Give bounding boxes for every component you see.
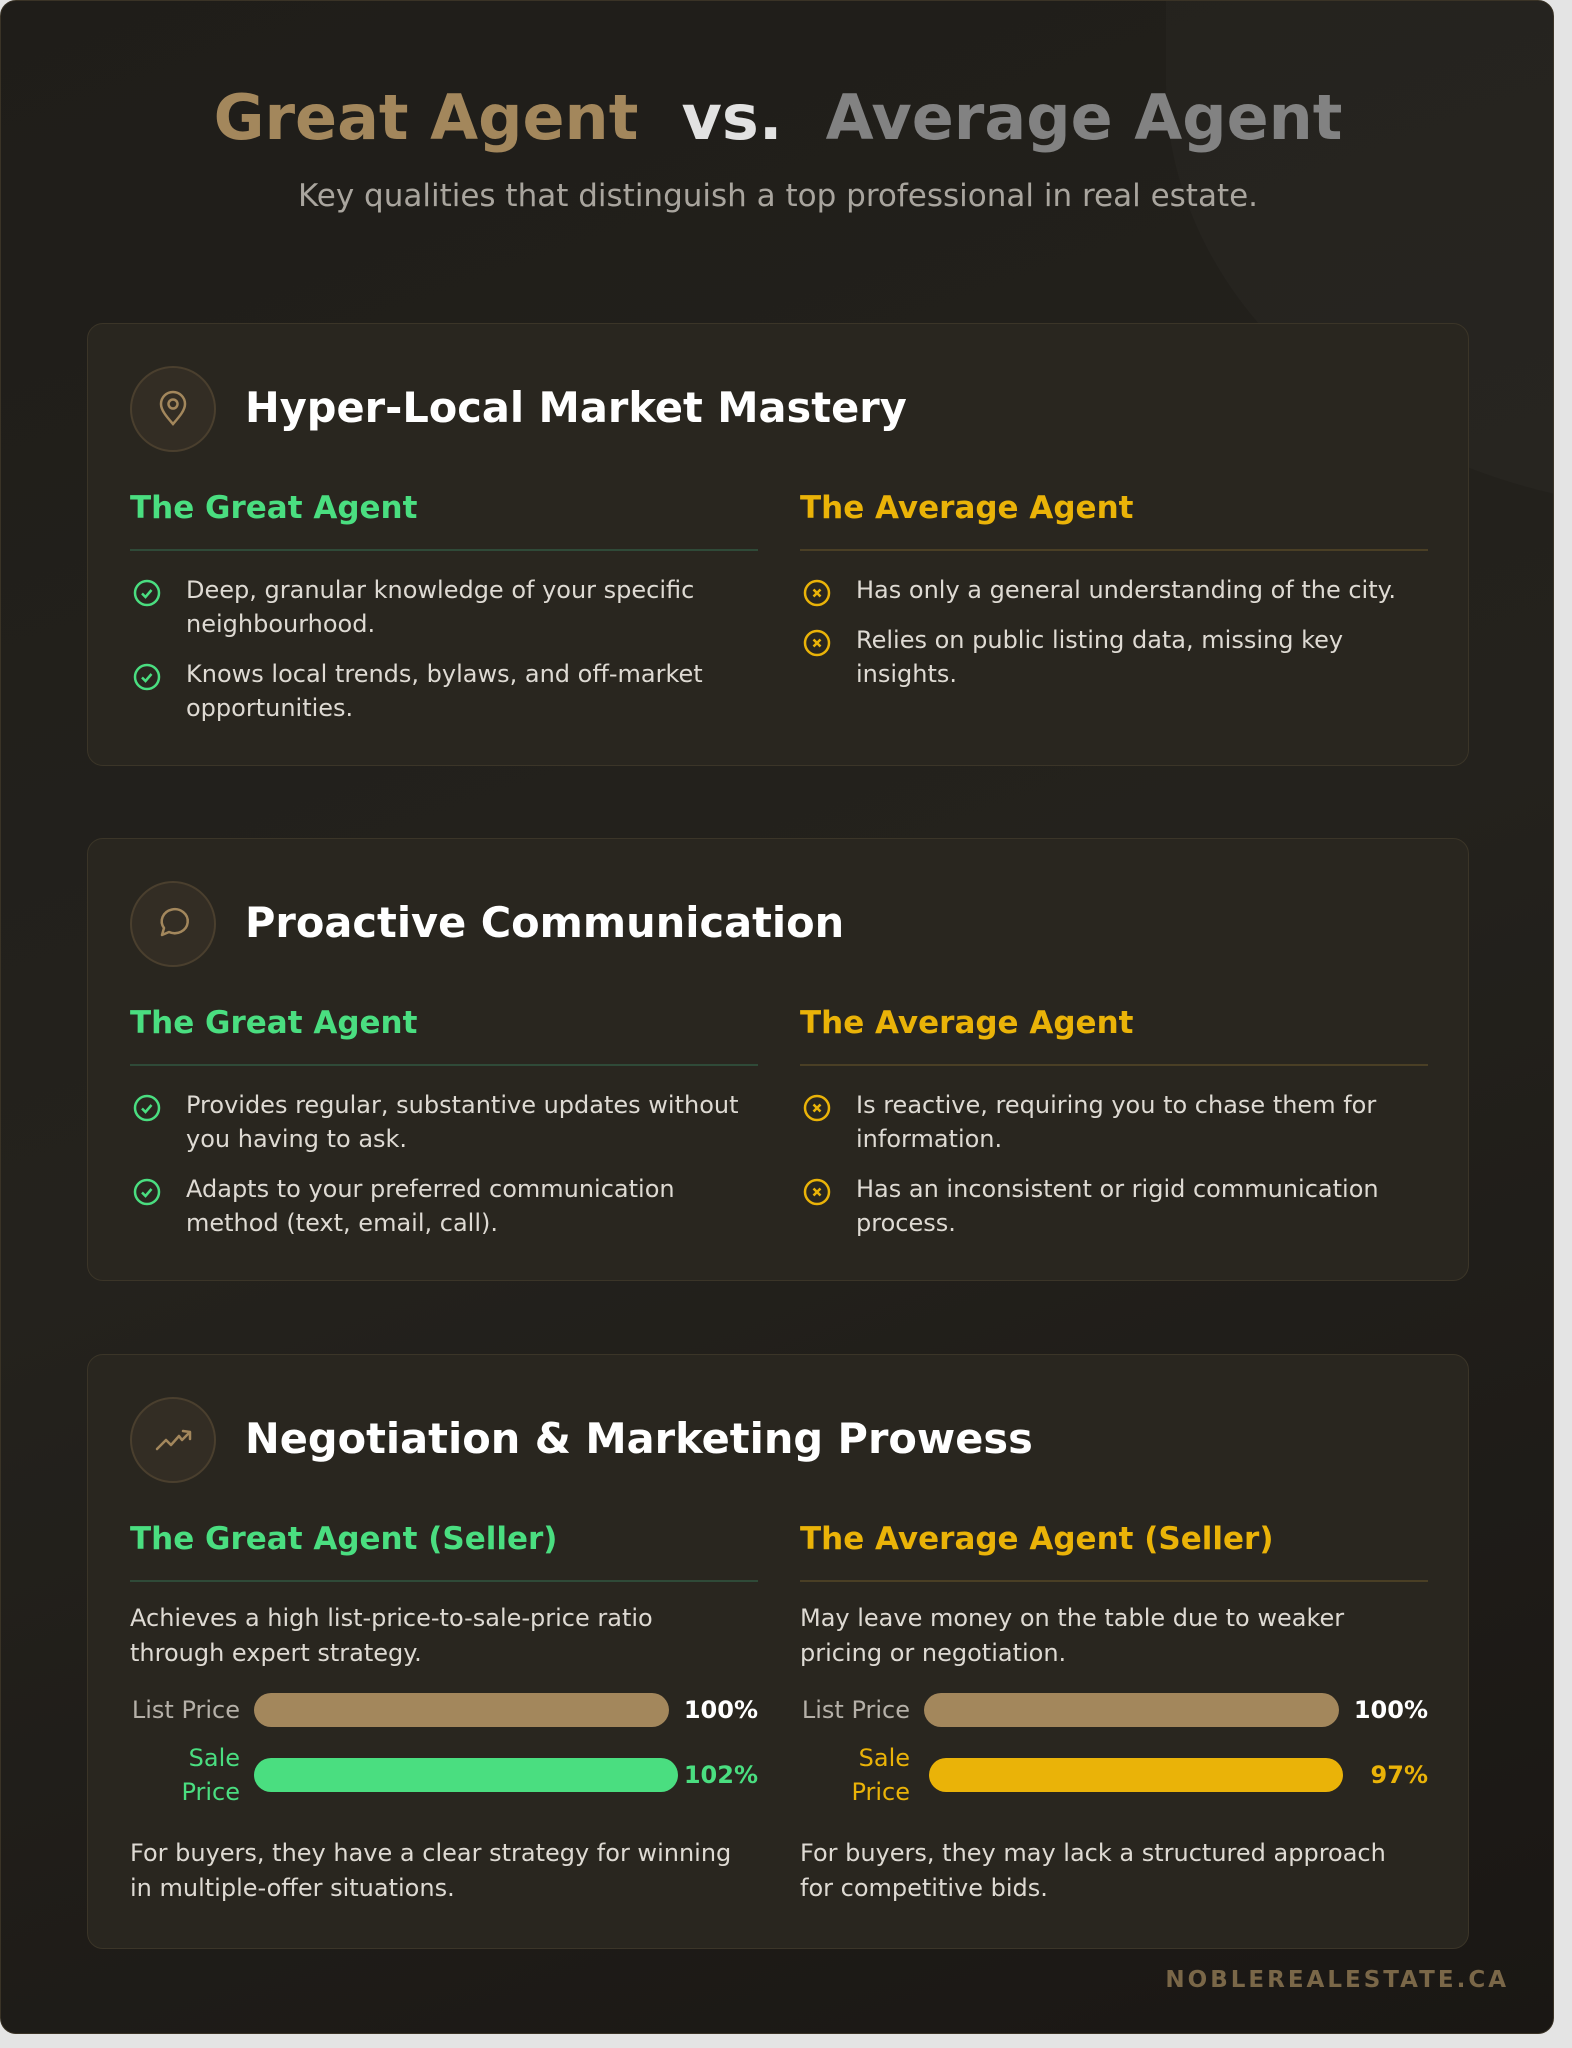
bar chart: great agent: 102% [684,1761,758,1789]
bar chart: average agent: 97% [1371,1761,1428,1789]
column: average agent: Has only a general understanding of the city. [856,576,1396,604]
column: average agent [800,1005,1428,1237]
column: average agent: The Average Agent [800,1005,1133,1041]
column: average agent: Is reactive, requiring you to chase them for information. [856,1091,1376,1153]
column: average agent: The Average Agent [800,490,1133,526]
title: Great Agent vs. Average Agent [214,81,1342,154]
column: average agent seller: The Average Agent (Seller) [800,1521,1274,1557]
column: great agent seller: The Great Agent (Seller) [130,1521,557,1557]
bar chart: great agent: Sale [189,1744,240,1772]
column: great agent seller: Achieves a high list-price-to-sale-price ratio through expert strategy. [130,1604,653,1667]
bar chart: great agent: 100% [684,1696,758,1724]
column: great agent: Knows local trends, bylaws, and off-market opportunities. [186,660,703,722]
icon: chat bubble [130,881,216,967]
panel: hyper-local market mastery [87,323,1469,766]
bar chart: average agent: Price [851,1778,910,1806]
icon: trend arrow [130,1397,216,1483]
column: great agent [130,490,758,722]
footer brand: NOBLEREALESTATE.CA [1165,1967,1509,1993]
icon: location pin [130,366,216,452]
bar chart: average agent: Sale [859,1744,910,1772]
column: average agent: Has an inconsistent or rigid communication process. [856,1175,1379,1237]
panel: negotiation & marketing [87,1354,1469,1949]
subtitle: Key qualities that distinguish a top professional in real estate. [298,178,1258,214]
column: great agent: Adapts to your preferred communication method (text, email, call). [186,1175,675,1237]
column: great agent: The Great Agent [130,1005,417,1041]
column: average agent: Relies on public listing data, missing key insights. [856,626,1343,688]
column: average agent seller [800,1521,1428,1902]
column: great agent seller [130,1521,758,1902]
column: great agent: Provides regular, substantive updates without you having to ask. [186,1091,739,1153]
column: average agent seller: For buyers, they may lack a structured approach for competitive bids. [800,1839,1386,1902]
column: average agent seller: May leave money on the table due to weaker pricing or negotiation. [800,1604,1344,1667]
column: great agent seller: For buyers, they have a clear strategy for winning in multiple-offer situations. [130,1839,731,1902]
heading: Proactive Communication [245,898,844,947]
bar chart: great agent [132,1693,758,1806]
column: average agent [800,490,1428,688]
bar chart: great agent: Price [181,1778,240,1806]
bar chart: average agent: 100% [1354,1696,1428,1724]
bar chart: great agent: List Price [132,1696,240,1724]
bar chart: average agent [802,1693,1428,1806]
bar chart: average agent: List Price [802,1696,910,1724]
heading: Negotiation & Marketing Prowess [245,1414,1033,1463]
column: great agent: The Great Agent [130,490,417,526]
column: great agent: Deep, granular knowledge of your specific neighbourhood. [186,576,694,638]
panel: proactive communication [87,838,1469,1281]
column: great agent [130,1005,758,1237]
heading: Hyper-Local Market Mastery [245,383,907,432]
